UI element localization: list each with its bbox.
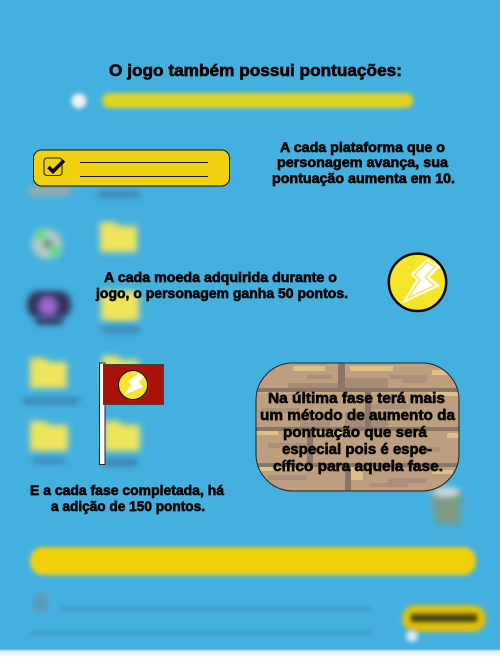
wood panel text: pontuação que será — [283, 424, 428, 441]
yellow checklist panel — [34, 150, 230, 186]
icon: checkbox — [44, 158, 64, 176]
icon: flag — [100, 363, 164, 464]
text: platform points — [272, 139, 455, 186]
blurred footer line — [60, 607, 370, 611]
wood panel text — [260, 390, 456, 475]
text: platform points: A cada plataforma que o — [280, 139, 445, 155]
title: O jogo também possui pontuações: — [109, 61, 402, 80]
bottom white strip — [0, 649, 500, 657]
text: level points — [30, 482, 224, 514]
blurred white dot — [406, 630, 418, 642]
text: level points: a adição de 150 pontos. — [51, 498, 205, 514]
wood panel — [256, 363, 460, 491]
blurred footer line — [31, 631, 371, 635]
blurred footer icon — [33, 593, 48, 613]
text: platform points: pontuação aumenta em 10. — [272, 170, 455, 186]
text: coin points: jogo, o personagem ganha 50 pontos. — [95, 285, 348, 301]
blurred desktop icons — [22, 186, 462, 524]
blurred yellow footer bar — [30, 547, 476, 575]
wood panel text: Na última fase terá mais — [268, 390, 445, 407]
wood panel text: especial pois é espe- — [282, 441, 432, 458]
wood panel text: cífico para aquela fase. — [273, 458, 443, 475]
text: platform points: personagem avança, sua — [277, 154, 448, 170]
blurred yellow bar — [102, 93, 413, 108]
icon: lightning coin — [389, 254, 446, 311]
blurred white dot — [72, 94, 86, 108]
text: coin points: A cada moeda adquirida durante o — [104, 269, 337, 285]
text: coin points — [95, 269, 348, 301]
text: level points: E a cada fase completada, há — [30, 482, 224, 498]
wood panel text: um método de aumento da — [260, 407, 456, 424]
blurred continue button — [402, 605, 486, 632]
